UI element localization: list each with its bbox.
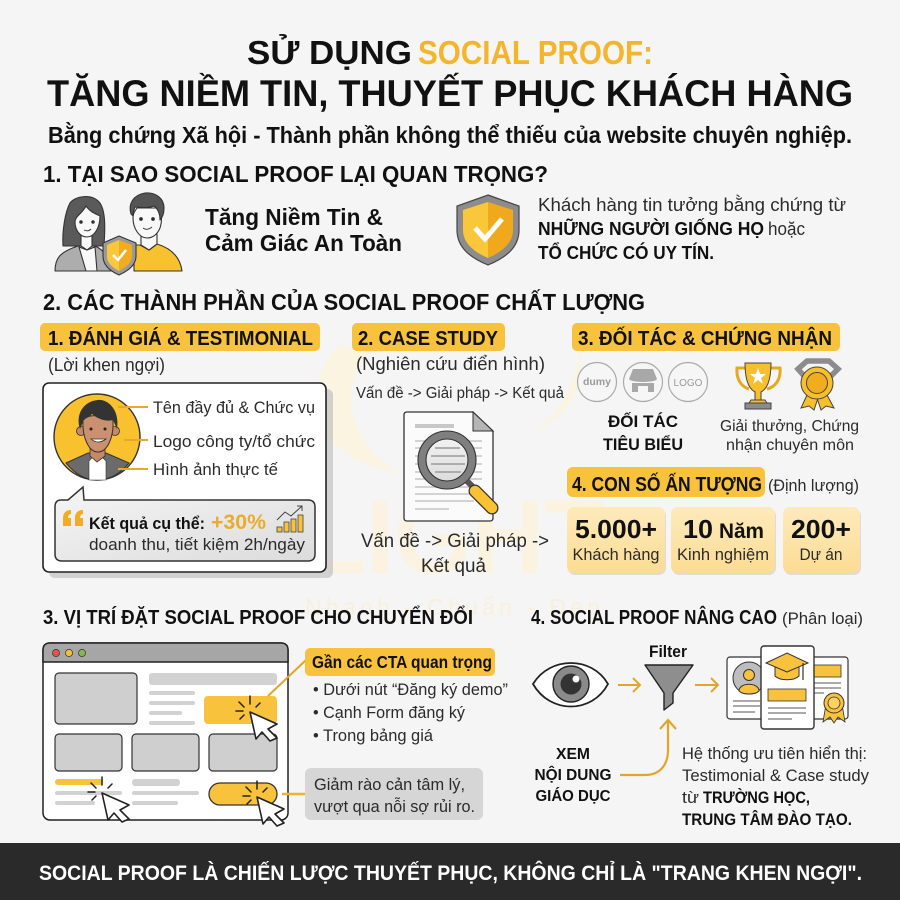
icon: avatar xyxy=(54,394,140,480)
text: trust and safety: Cảm Giác An Toàn xyxy=(205,230,402,256)
stat card: customers: 5.000+ xyxy=(575,514,657,544)
icon: cursor xyxy=(236,696,277,741)
text: real photo: Hình ảnh thực tế xyxy=(153,460,279,479)
text: awards xyxy=(720,418,859,454)
list: CTA placements: • Cạnh Form đăng ký xyxy=(313,703,465,722)
text: system priority: TRUNG TÂM ĐÀO TẠO. xyxy=(682,810,852,829)
watermark: Nhanh - Chuẩn - Đẹp xyxy=(305,594,600,620)
heading: section 3: 3. VỊ TRÍ ĐẶT SOCIAL PROOF CHO CHUYỂN ĐỔI xyxy=(43,605,473,629)
arrow xyxy=(618,678,640,692)
subtitle: Bằng chứng Xã hội - Thành phần không thể thiếu của website chuyên nghiệp. xyxy=(48,121,852,148)
heading: section 4: (Phân loại) xyxy=(782,609,863,628)
panel: testimonial card xyxy=(43,383,333,578)
icon: eye xyxy=(533,663,608,706)
stat card: experience xyxy=(671,507,776,575)
text: why it matters: TỔ CHỨC CÓ UY TÍN. xyxy=(538,242,714,263)
footer banner: SOCIAL PROOF LÀ CHIẾN LƯỢC THUYẾT PHỤC, KHÔNG CHỈ LÀ "TRANG KHEN NGỢI". xyxy=(39,861,862,885)
title xyxy=(47,34,853,114)
text: system priority xyxy=(682,745,870,829)
label: filter: Filter xyxy=(649,643,688,661)
text: partners label: TIÊU BIỂU xyxy=(603,435,683,454)
text: education content xyxy=(534,746,612,805)
stat card: experience: Năm xyxy=(719,520,764,543)
text: partners label xyxy=(603,411,683,454)
stat card: projects xyxy=(783,507,861,575)
connector line xyxy=(282,793,305,795)
callout: reduce barriers: vượt qua nỗi sợ rủi ro. xyxy=(314,797,475,816)
callout: reduce barriers xyxy=(305,768,483,820)
tag: testimonial: 1. ĐÁNH GIÁ & TESTIMONIAL xyxy=(48,327,313,350)
tag: case study: 2. CASE STUDY xyxy=(358,328,499,350)
list: CTA placements: • Dưới nút “Đăng ký demo” xyxy=(313,680,508,699)
text: case study flow: Kết quả xyxy=(421,556,486,577)
icon: partner logos: dumy xyxy=(583,376,611,388)
callout: near CTA: Gần các CTA quan trọng xyxy=(312,652,492,672)
text: case study flow: Vấn đề -> Giải pháp -> xyxy=(361,531,549,552)
text: system priority: từ xyxy=(682,789,699,807)
icon: medal xyxy=(798,361,838,410)
stat card: customers xyxy=(567,507,666,575)
text: why it matters: Khách hàng tin tưởng bằng chứng từ xyxy=(538,194,846,215)
icon: growth chart xyxy=(277,506,303,532)
icon: trophy xyxy=(737,363,780,409)
text: why it matters: hoặc xyxy=(768,219,805,239)
text: system priority: Testimonial & Case study xyxy=(682,767,870,785)
arrow xyxy=(695,678,718,692)
text: why it matters: NHỮNG NGƯỜI GIỐNG HỌ xyxy=(538,218,764,239)
list: CTA placements xyxy=(313,680,508,745)
icon: shield check xyxy=(457,195,519,265)
text: why it matters xyxy=(538,194,846,263)
text: name and title: Tên đầy đủ & Chức vụ xyxy=(153,398,315,417)
icon: quote xyxy=(63,510,83,526)
text: trust and safety: Tăng Niềm Tin & xyxy=(205,204,383,230)
watermark xyxy=(305,345,605,620)
callout: concrete result: +30% xyxy=(211,511,266,534)
icon: filtered documents xyxy=(727,646,848,729)
text: system priority: TRƯỜNG HỌC, xyxy=(703,788,810,807)
icon: cursor xyxy=(243,781,284,826)
icon: partner logos: LOGO xyxy=(674,378,703,389)
title: SỬ DỤNG xyxy=(247,34,412,71)
text: problem solution result: Vấn đề -> Giải pháp -> Kết quả xyxy=(356,385,564,402)
text: awards: Giải thưởng, Chứng xyxy=(720,418,859,435)
icon: document with magnifier xyxy=(404,412,493,521)
callout: concrete result xyxy=(55,487,315,561)
tag: impressive numbers xyxy=(567,467,859,497)
icon: people with shield xyxy=(55,193,182,275)
text: system priority: Hệ thống ưu tiên hiển thị: xyxy=(682,745,867,763)
stat card: experience: Kinh nghiệm xyxy=(677,545,769,564)
arrow: education to filter xyxy=(620,720,676,775)
title: TĂNG NIỀM TIN, THUYẾT PHỤC KHÁCH HÀNG xyxy=(47,73,853,114)
title: SOCIAL PROOF: xyxy=(418,34,653,71)
text: company logo: Logo công ty/tổ chức xyxy=(153,432,316,451)
stat card: projects: Dự án xyxy=(800,545,842,564)
tag: impressive numbers: 4. CON SỐ ẤN TƯỢNG xyxy=(572,472,762,496)
text: trust and safety xyxy=(205,204,402,256)
label lines xyxy=(118,407,148,469)
list: CTA placements: • Trong bảng giá xyxy=(313,726,434,745)
text: case study flow xyxy=(361,531,549,577)
stat card: customers: Khách hàng xyxy=(572,545,660,564)
heading: section 1: 1. TẠI SAO SOCIAL PROOF LẠI QUAN TRỌNG? xyxy=(43,161,548,187)
text: education content: GIÁO DỤC xyxy=(536,786,611,805)
heading: section 4: 4. SOCIAL PROOF NÂNG CAO xyxy=(531,605,777,629)
text: partners label: ĐỐI TÁC xyxy=(608,411,678,431)
text: education content: XEM xyxy=(556,746,590,763)
stat card: experience: 10 xyxy=(683,514,713,544)
watermark: LIGHT xyxy=(305,479,605,596)
icon: cursor xyxy=(88,777,129,822)
footer banner xyxy=(0,843,900,900)
tag: impressive numbers: (Định lượng) xyxy=(768,476,859,495)
callout: concrete result: doanh thu, tiết kiệm 2h/ngày xyxy=(89,535,305,554)
callout: concrete result: Kết quả cụ thể: xyxy=(89,515,205,533)
text: case study subtitle: (Nghiên cứu điển hình) xyxy=(356,354,545,374)
heading: section 2: 2. CÁC THÀNH PHẦN CỦA SOCIAL PROOF CHẤT LƯỢNG xyxy=(43,287,645,315)
callout line xyxy=(268,660,306,696)
icon: partner logos xyxy=(578,362,708,402)
text: awards: nhận chuyên môn xyxy=(726,437,854,454)
callout: near CTA xyxy=(305,648,495,676)
stat card: projects: 200+ xyxy=(791,514,851,544)
text: praise: (Lời khen ngợi) xyxy=(48,355,165,375)
callout: reduce barriers: Giảm rào cản tâm lý, xyxy=(314,775,465,794)
tag: partners: 3. ĐỐI TÁC & CHỨNG NHẬN xyxy=(578,326,832,350)
browser mockup xyxy=(43,643,288,826)
icon: funnel xyxy=(645,665,693,710)
text: education content: NỘI DUNG xyxy=(534,765,612,784)
